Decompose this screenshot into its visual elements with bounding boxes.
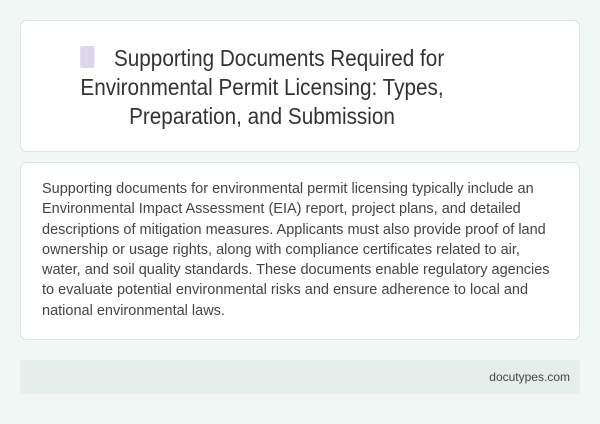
text block: descriptions of mitigation measures. Applicants must also provide proof of land xyxy=(42,222,546,238)
text block: water, and soil quality standards. These documents enable regulatory agencies xyxy=(42,262,550,278)
text block: Environmental Impact Assessment (EIA) report, project plans, and detailed xyxy=(42,201,521,217)
panel: title xyxy=(20,20,580,152)
title xyxy=(80,45,444,129)
footer xyxy=(20,360,580,394)
panel: description xyxy=(20,162,580,340)
text block: national environmental laws. xyxy=(42,303,225,319)
text block: to evaluate potential environmental risks and ensure adherence to local and xyxy=(42,282,528,298)
text block: Supporting documents for environmental permit licensing typically include an xyxy=(42,181,534,197)
title: Preparation, and Submission xyxy=(129,103,395,129)
text block: ownership or usage rights, along with compliance certificates related to air, xyxy=(42,242,520,258)
text block xyxy=(42,181,550,319)
footer: docutypes.com xyxy=(489,370,570,384)
title: Environmental Permit Licensing: Types, xyxy=(80,74,444,100)
title: Supporting Documents Required for xyxy=(114,45,444,71)
